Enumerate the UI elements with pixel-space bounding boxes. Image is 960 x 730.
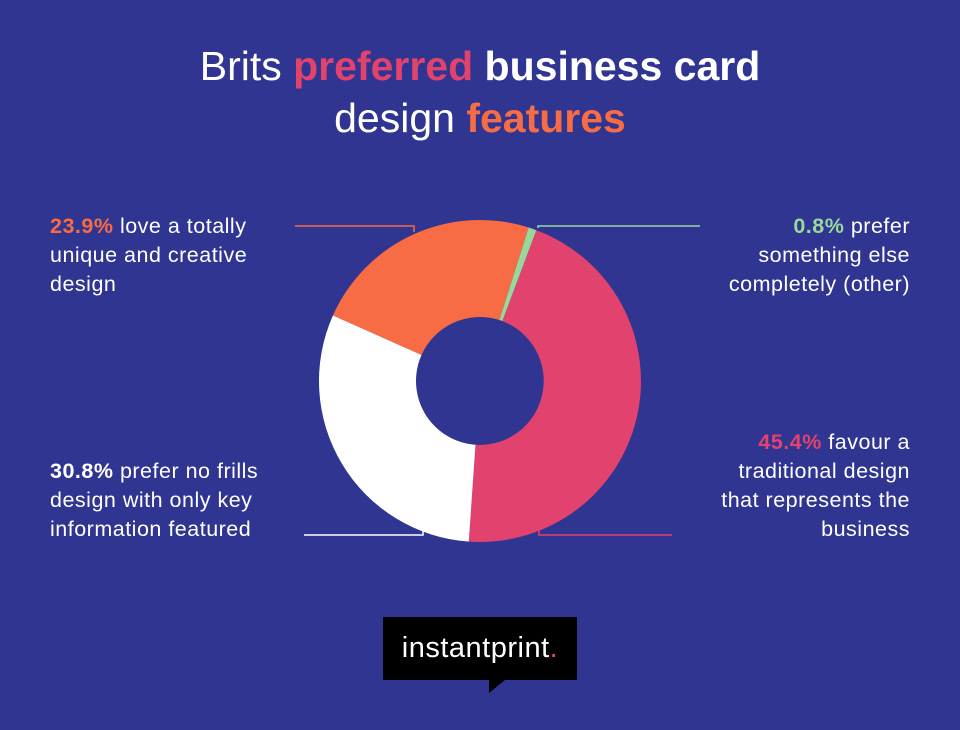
text: 0.8%: 0.8% prefer: [793, 214, 910, 238]
text: 45.4%: traditional design: [738, 459, 910, 483]
text: 23.9%: design: [50, 272, 116, 296]
text: 23.9%: unique and creative: [50, 243, 247, 267]
text: 0.8%: [729, 214, 910, 296]
text: 30.8%: [50, 459, 258, 541]
leader lines: [295, 226, 700, 535]
text: 23.9%: 23.9% love a totally: [50, 214, 246, 238]
text: 45.4%: 45.4% favour a: [758, 430, 910, 454]
segment: green 0.8%: [499, 228, 536, 321]
logo: instantprint: [383, 617, 577, 680]
text: 23.9%: [50, 214, 247, 296]
text: 30.8%: design with only key: [50, 488, 252, 512]
segment: pink 45.4%: [469, 230, 641, 542]
text: 0.8%: something else: [758, 243, 910, 267]
segment: orange 23.9%: [333, 220, 529, 355]
text: 45.4%: [721, 430, 910, 541]
text: 30.8%: information featured: [50, 517, 251, 541]
text: 45.4%: business: [821, 517, 910, 541]
text: 30.8%: 30.8% prefer no frills: [50, 459, 258, 483]
text: 0.8%: completely (other): [729, 272, 910, 296]
title: design features: [334, 95, 626, 141]
logo: instantprint: instantprint.: [402, 632, 558, 664]
segment: white 30.8%: [319, 316, 476, 542]
text: 45.4%: that represents the: [721, 488, 910, 512]
title: [200, 43, 760, 141]
title: Brits preferred business card: [200, 43, 760, 89]
